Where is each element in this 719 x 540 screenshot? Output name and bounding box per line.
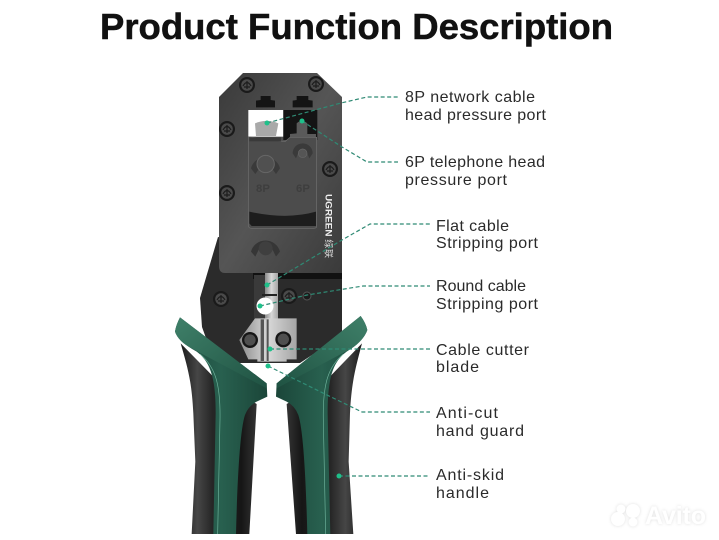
right handle	[276, 316, 367, 534]
brand mark	[324, 194, 335, 258]
screws	[213, 76, 338, 307]
leader: flat cable	[264, 224, 430, 288]
stripping channel	[253, 273, 342, 333]
crimp die block	[248, 137, 317, 228]
lower die arc	[251, 240, 280, 257]
tool lower body	[200, 237, 342, 363]
leader: round cable	[258, 286, 430, 308]
label: hand guard	[436, 405, 524, 440]
leader: 6P port	[300, 118, 398, 162]
brand mark: UGREEN	[324, 194, 334, 237]
cutter blade	[239, 318, 297, 362]
label: hand guard: Anti-cut	[436, 405, 499, 422]
label: 8P port: head pressure port	[405, 107, 547, 124]
label: hand guard: hand guard	[436, 423, 524, 440]
label: 6P port	[405, 154, 545, 189]
leader: handle	[336, 474, 430, 478]
label: round cable: Round cable	[436, 278, 526, 295]
left handle	[175, 317, 267, 534]
crimp die block: 6P	[296, 183, 310, 195]
label: 8P port	[405, 89, 547, 124]
label: 6P port: 6P telephone head	[405, 154, 545, 171]
watermark: Avito	[645, 502, 706, 530]
label: 8P port: 8P network cable	[405, 89, 535, 106]
label: handle: handle	[436, 485, 489, 502]
crimp ports	[248, 96, 317, 140]
brand mark: 绿联	[324, 239, 335, 258]
label: 6P port: pressure port	[405, 172, 508, 189]
label: cutter blade: Cable cutter	[436, 342, 530, 359]
title: Product Function Description	[100, 6, 613, 47]
label: handle	[436, 467, 504, 502]
head plate	[219, 73, 342, 273]
label: cutter blade: blade	[436, 359, 479, 376]
crimping tool	[175, 73, 367, 534]
leader: 8P port	[264, 97, 398, 126]
label: round cable: Stripping port	[436, 296, 539, 313]
label: handle: Anti-skid	[436, 467, 504, 484]
label: cutter blade	[436, 342, 530, 376]
watermark	[611, 502, 706, 530]
label: round cable	[436, 278, 539, 313]
crimp die block: 8P	[256, 183, 270, 195]
leader: cutter blade	[268, 346, 430, 352]
label: flat cable: Stripping port	[436, 235, 539, 252]
label: flat cable	[436, 218, 539, 252]
leader: hand guard	[266, 364, 430, 412]
label: flat cable: Flat cable	[436, 218, 509, 235]
